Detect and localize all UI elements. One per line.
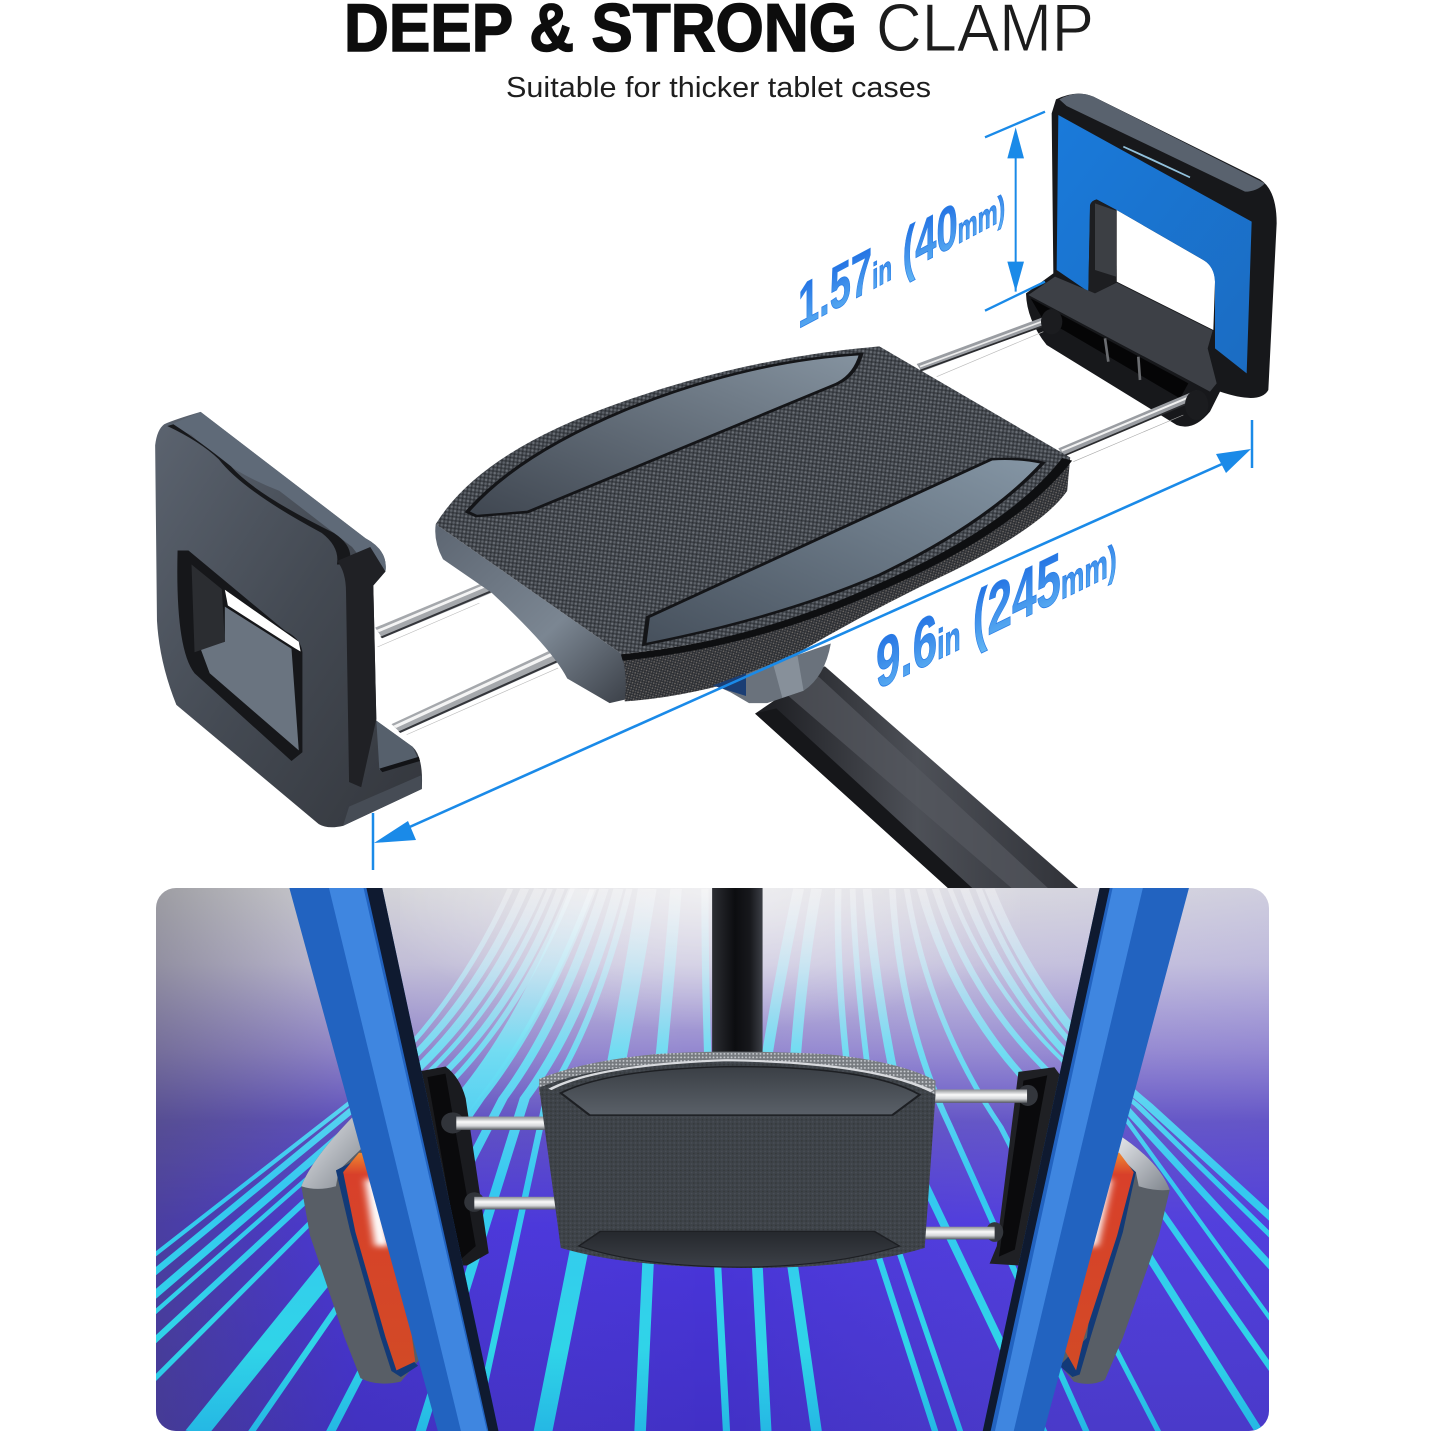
top knurled rim (539, 1052, 936, 1095)
blue pad (1057, 115, 1252, 373)
arm of the mount (755, 666, 1079, 889)
clamp: right jaw (917, 94, 1277, 462)
jaw top face (1059, 94, 1265, 192)
left tablet edge (289, 887, 499, 1432)
jaw window (177, 550, 302, 761)
jaw foot (376, 721, 418, 770)
window through jaw (1117, 210, 1215, 330)
upper inset panel (467, 354, 861, 516)
jaw post (1088, 200, 1117, 294)
dimension: 1.57in depth arrow (985, 112, 1045, 311)
rod collars (1041, 309, 1062, 334)
dimension label: 9.6in (245mm): 9.6in (245mm) (876, 509, 1117, 705)
light rays (150, 889, 1281, 1432)
rods (456, 1089, 1027, 1239)
lower inset panel (579, 1231, 899, 1267)
left rods (375, 579, 582, 735)
right tablet edge (982, 887, 1189, 1432)
jaw black body (1026, 94, 1277, 427)
support pole (712, 887, 763, 1056)
end face (435, 524, 626, 703)
clamp: left jaw, rods and central body (155, 346, 1070, 827)
left bracket (417, 1067, 489, 1265)
jaw top edge (167, 412, 386, 572)
textured back plate (539, 1060, 936, 1268)
right bracket (986, 1067, 1062, 1265)
upper inset panel (561, 1067, 920, 1115)
central body (435, 346, 1070, 703)
left gripping pad (301, 1118, 418, 1384)
black rim (622, 459, 1067, 657)
jaw base (1028, 277, 1217, 392)
textured top surface (436, 346, 1070, 654)
panel background (156, 888, 1269, 1431)
dimension: 9.6in width arrow (373, 420, 1252, 870)
dimension label: 1.57in (40mm): 1.57in (40mm) (798, 164, 1005, 343)
subtitle: Suitable for thicker tablet cases (506, 72, 931, 104)
slot face (1031, 298, 1188, 398)
rods (917, 314, 1056, 372)
lower inset panel (644, 459, 1043, 644)
panel: clamp rear view on tablet (150, 887, 1281, 1432)
central body rear view (539, 1052, 936, 1268)
right gripping pad (1061, 1138, 1170, 1384)
front knurled band (622, 458, 1070, 701)
pad highlight (1123, 147, 1190, 177)
left jaw frame (155, 412, 422, 827)
swivel joint (716, 643, 831, 703)
